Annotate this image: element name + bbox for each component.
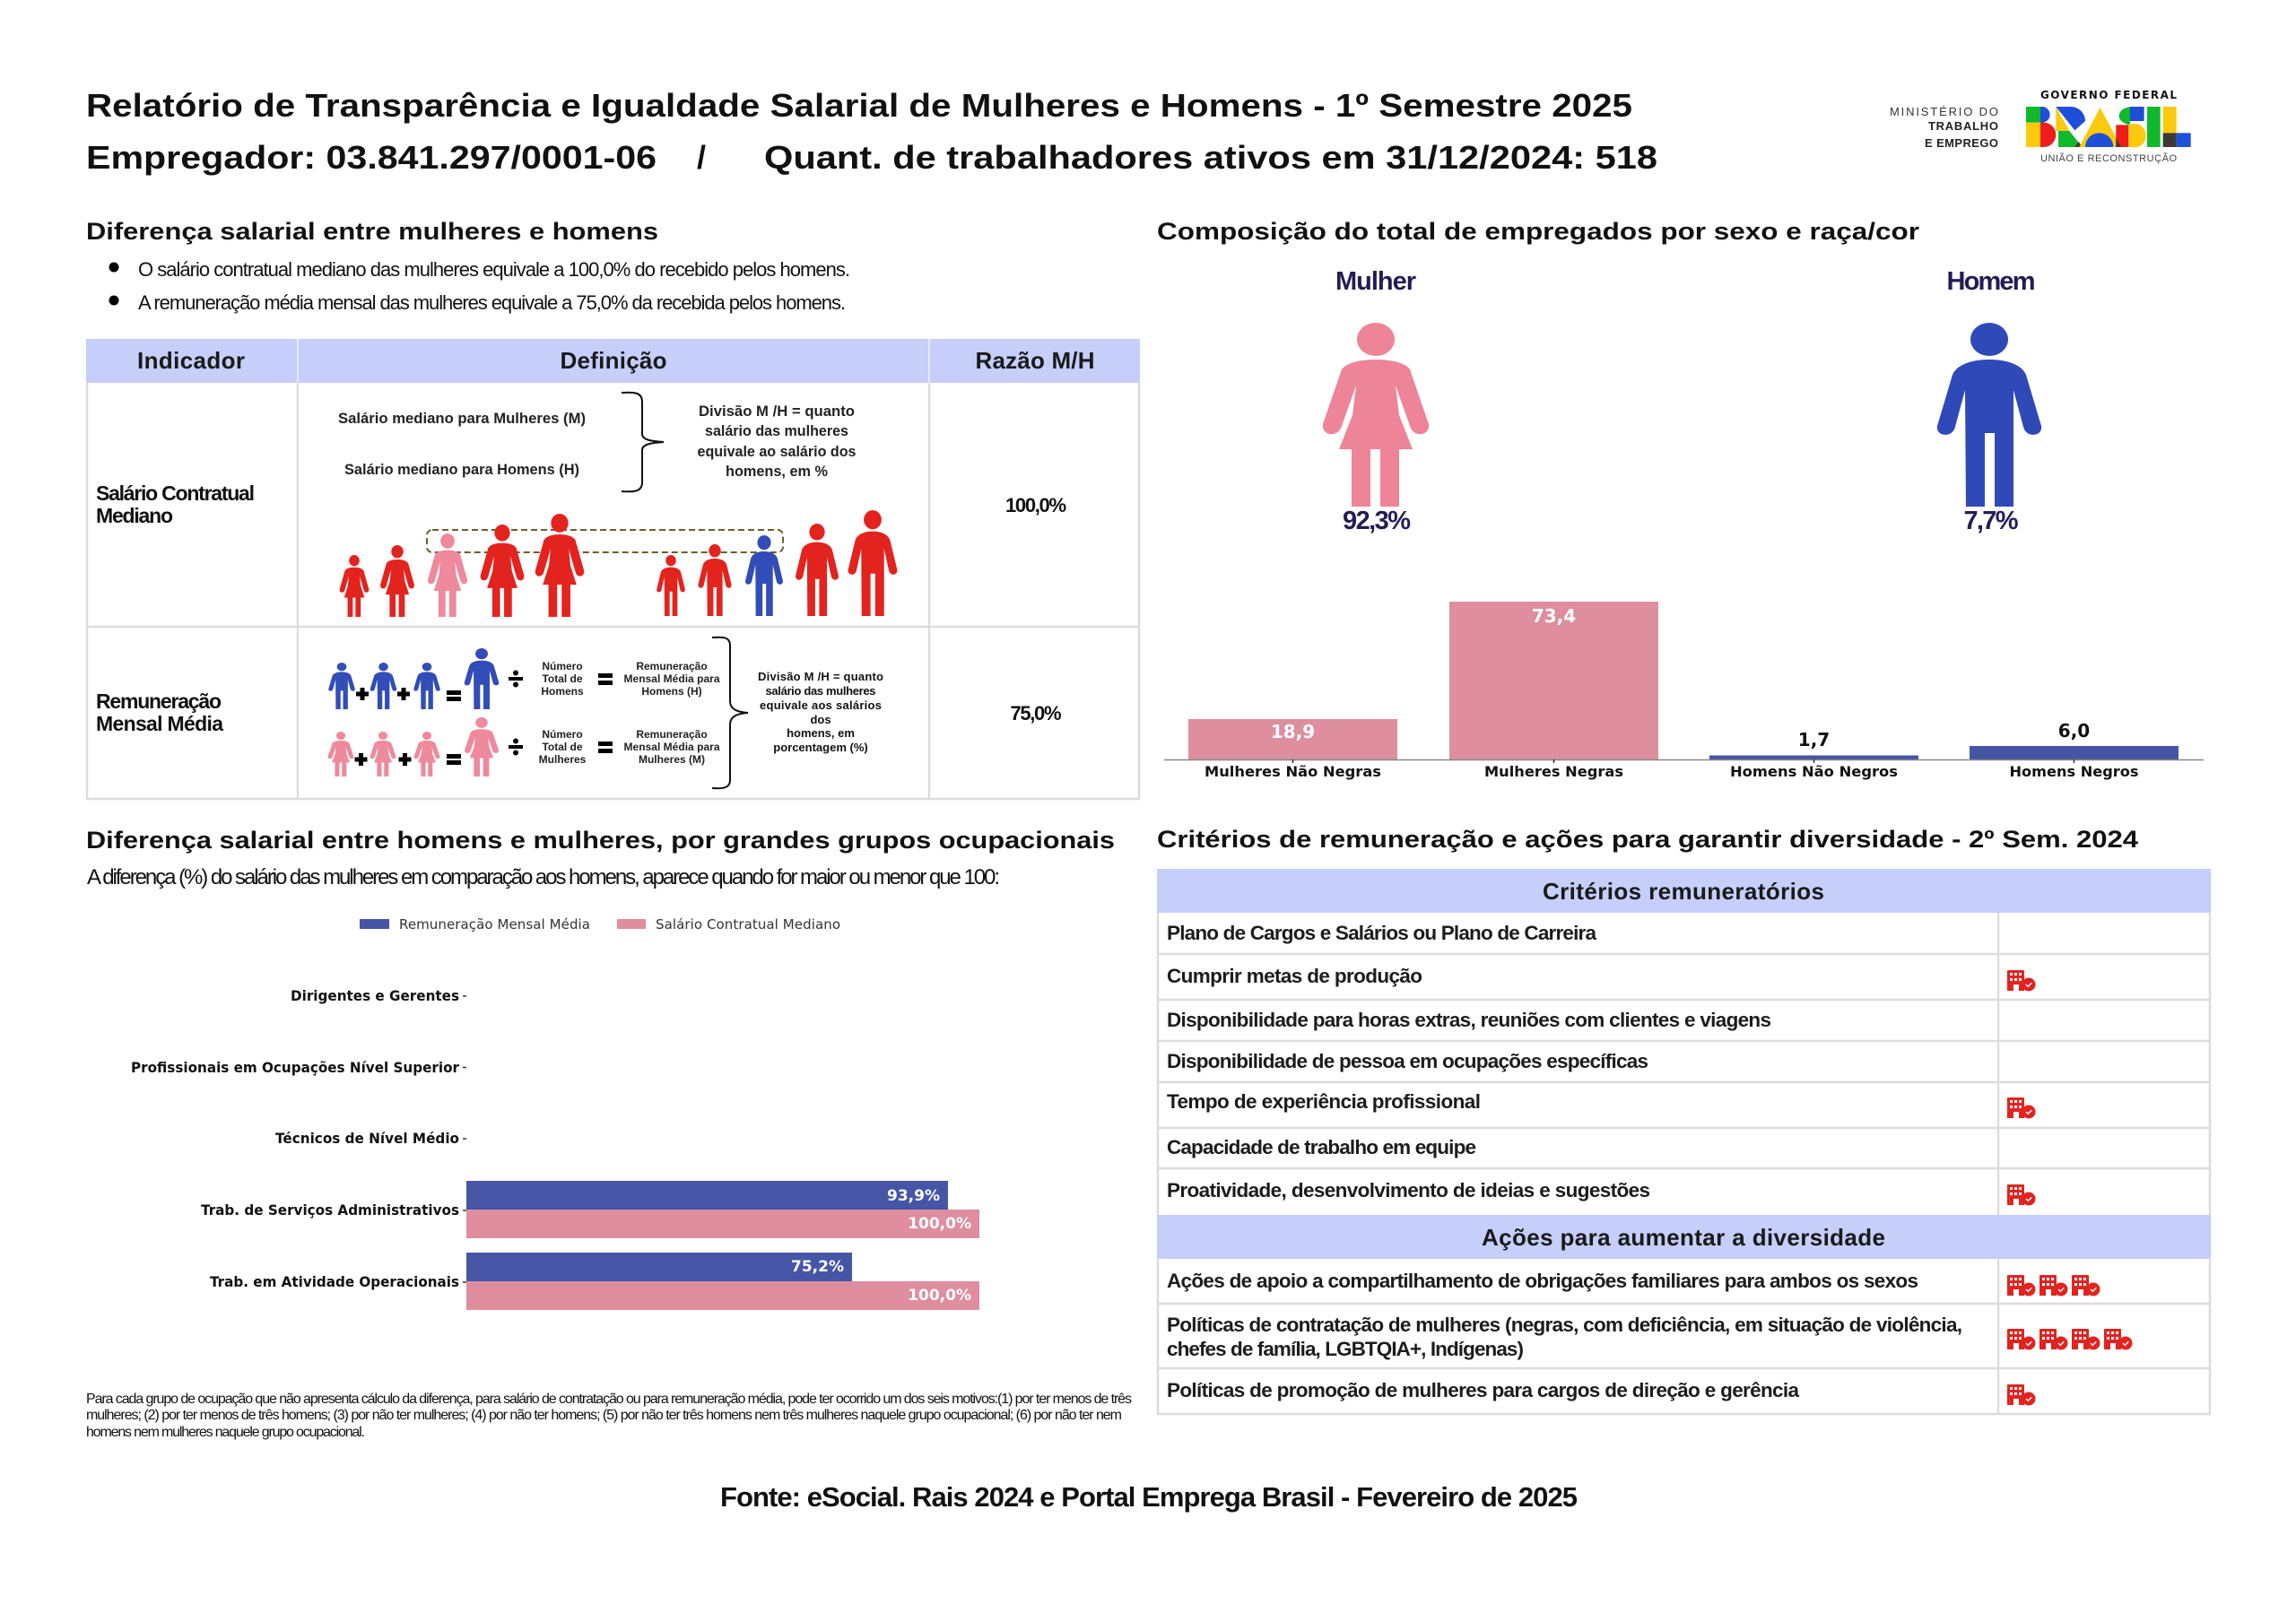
median division explanation: Divisão M /H = quanto	[699, 403, 855, 420]
diversity action rows: chefes de família, LGBTQIA+, Indígenas)	[1167, 1338, 1524, 1360]
bar chart: occupational groups: Dirigentes e Gerentes	[291, 987, 459, 1004]
logo: Ministério do Trabalho e Emprego: TRABALHO	[1928, 119, 1998, 133]
median definition text	[338, 410, 586, 478]
source line: Fonte: eSocial. Rais 2024 e Portal Emprega Brasil - Fevereiro de 2025	[720, 1481, 1578, 1513]
title line 1: Relatório de Transparência e Igualdade Salarial de Mulheres e Homens - 1º Semestre 2025	[86, 87, 1632, 124]
bar chart: composition	[1164, 602, 2204, 780]
median division explanation: homens, em %	[726, 463, 828, 480]
diversity action rows: Ações de apoio a compartilhamento de obrigações familiares para ambos os sexos	[1167, 1270, 1918, 1292]
bar chart: composition: 18,9	[1271, 721, 1315, 742]
brace: average	[712, 638, 748, 788]
title line 2: active workers: Quant. de trabalhadores ativos em 31/12/2024: 518	[764, 139, 1657, 176]
average division explanation: equivale aos salários	[760, 698, 882, 712]
men figures ordered by salary	[657, 510, 897, 616]
title separator: /	[697, 139, 706, 176]
criteria rows: Proatividade, desenvolvimento de ideias e sugestões	[1167, 1179, 1650, 1201]
header: Ações para aumentar a diversidade	[1157, 1215, 2211, 1259]
row label: Remuneração Mensal Média: Remuneração	[96, 690, 222, 713]
men average equation: Mensal Média para	[624, 672, 720, 685]
legend	[360, 916, 840, 932]
criteria rows: Plano de Cargos e Salários ou Plano de Carreira	[1167, 922, 1596, 944]
diversity action rows: Políticas de promoção de mulheres para cargos de direção e gerência	[1167, 1379, 1799, 1401]
legend: Salário Contratual Mediano	[656, 916, 840, 932]
average division explanation: porcentagem (%)	[773, 741, 868, 754]
bar chart: occupational groups: 75,2%	[791, 1258, 844, 1276]
median division explanation	[698, 403, 856, 480]
bar chart: composition: Mulheres Negras	[1484, 763, 1623, 780]
value: 75,0%: 75,0%	[1010, 702, 1062, 724]
row label: Salário Contratual Mediano	[96, 481, 255, 527]
footnote: homens nem mulheres naquele grupo ocupacional.	[86, 1425, 365, 1440]
bullet list	[109, 258, 850, 314]
panel: man share: Homem	[1946, 267, 2036, 296]
logo: Governo Federal Brasil	[2026, 89, 2191, 164]
panel: man share: 7,7%	[1964, 507, 2019, 535]
logo: Ministério do Trabalho e Emprego	[1890, 105, 1998, 150]
women average equation: Total de	[542, 741, 583, 753]
men average equation: Remuneração	[636, 660, 708, 672]
average division explanation: dos	[810, 713, 831, 726]
icons: companies count	[2007, 970, 2133, 1406]
panel: indicators table	[86, 339, 1140, 799]
bar chart: occupational groups: 93,9%	[887, 1187, 940, 1205]
men average equation: Total de	[542, 672, 583, 685]
women average equation	[328, 717, 720, 776]
men average equation: Número	[542, 660, 583, 672]
bar chart: occupational groups: Trab. de Serviços Administrativos	[201, 1201, 459, 1219]
logo: Ministério do Trabalho e Emprego: E EMPREGO	[1925, 136, 1998, 150]
women average equation: Mulheres (M)	[639, 753, 705, 766]
panel: woman share: 92,3%	[1343, 507, 1411, 535]
bar chart: occupational groups: Técnicos de Nível Médio	[275, 1130, 459, 1147]
logo: Ministério do Trabalho e Emprego: MINISTÉRIO DO	[1890, 105, 1998, 118]
women average equation: Remuneração	[636, 728, 708, 741]
bar chart: occupational groups: 100,0%	[908, 1287, 971, 1305]
row label: Salário Contratual Mediano: Mediano	[96, 504, 173, 527]
women average equation: Mulheres	[539, 753, 587, 766]
footnote	[86, 1392, 1132, 1440]
footnote: Para cada grupo de ocupação que não apresenta cálculo da diferença, para salário de contratação ou para remuneração média, pode ter ocorrido um dos seis motivos:(1) por ter menos de três	[86, 1392, 1132, 1407]
header: Ações para aumentar a diversidade: Ações para aumentar a diversidade	[1482, 1224, 1885, 1251]
bar chart: composition: 73,4	[1532, 605, 1576, 627]
panel: woman share	[1323, 267, 1429, 535]
title	[86, 87, 1657, 176]
heading: wage gap: Diferença salarial entre mulheres e homens	[86, 218, 658, 245]
panel: woman share: Mulher	[1335, 267, 1416, 296]
median division explanation: equivale ao salário dos	[698, 443, 856, 460]
median definition text: Salário mediano para Mulheres (M)	[338, 410, 586, 427]
logo: Governo Federal Brasil: UNIÃO E RECONSTRUÇÃO	[2040, 152, 2177, 164]
bar chart: occupational groups: 100,0%	[908, 1215, 971, 1233]
men average equation: Homens (H)	[641, 685, 702, 698]
women figures ordered by salary	[340, 514, 584, 617]
bar chart: composition: Homens Não Negros	[1730, 763, 1898, 780]
legend: Remuneração Mensal Média	[399, 916, 590, 932]
panel: criteria table	[1157, 869, 2211, 1414]
table header: Definição	[560, 347, 667, 374]
diversity action rows	[1167, 1270, 1962, 1401]
table header: Indicador	[137, 347, 245, 374]
bar chart: composition: Homens Negros	[2009, 763, 2138, 780]
criteria rows	[1167, 922, 1771, 1201]
average division explanation: homens, em	[787, 726, 855, 740]
criteria rows: Disponibilidade para horas extras, reuniões com clientes e viagens	[1167, 1009, 1771, 1031]
bar chart: composition: 6,0	[2058, 720, 2090, 742]
criteria rows: Capacidade de trabalho em equipe	[1167, 1136, 1476, 1158]
median dashed box	[427, 530, 783, 552]
median division explanation: salário das mulheres	[705, 422, 848, 439]
average division explanation: salário das mulheres	[766, 684, 875, 698]
heading: occupational groups: Diferença salarial entre homens e mulheres, por grandes grupos ocupacionais	[86, 827, 1115, 854]
footnote: mulheres; (2) por ter menos de três homens; (3) por não ter mulheres; (4) por não ter homens; (5) por não ter três homens nem três mulheres naquele grupo ocupacional; (6) por não ter nem	[86, 1408, 1122, 1423]
bar chart: composition: 1,7	[1798, 729, 1830, 750]
logo: Governo Federal Brasil: GOVERNO FEDERAL	[2040, 89, 2177, 101]
bullet list: O salário contratual mediano das mulheres equivale a 100,0% do recebido pelos homens.	[138, 258, 850, 281]
brace: median	[622, 393, 664, 491]
bar chart: occupational groups	[131, 987, 979, 1310]
table header: Razão M/H	[976, 347, 1094, 374]
header: Critérios remuneratórios: Critérios remuneratórios	[1543, 878, 1824, 905]
average division explanation	[758, 670, 883, 754]
men average equation: Homens	[541, 685, 584, 698]
row label: Remuneração Mensal Média	[96, 690, 223, 735]
title line 2: employer: Empregador: 03.841.297/0001-06	[86, 139, 657, 176]
diversity action rows: Políticas de contratação de mulheres (negras, com deficiência, em situação de violência,	[1167, 1314, 1962, 1336]
women average equation: Número	[542, 728, 583, 741]
women average equation: Mensal Média para	[624, 741, 720, 753]
heading: criteria: Critérios de remuneração e ações para garantir diversidade - 2º Sem. 2024	[1157, 826, 2138, 853]
value: 100,0%: 100,0%	[1005, 494, 1066, 516]
bullet list: A remuneração média mensal das mulheres equivale a 75,0% da recebida pelos homens.	[138, 291, 846, 314]
average division explanation: Divisão M /H = quanto	[758, 670, 883, 683]
median definition text: Salário mediano para Homens (H)	[344, 461, 579, 478]
row label: Remuneração Mensal Média: Mensal Média	[96, 712, 223, 735]
bar chart: occupational groups: Profissionais em Ocupações Nível Superior	[131, 1059, 459, 1076]
criteria rows: Disponibilidade de pessoa em ocupações específicas	[1167, 1050, 1648, 1072]
header: Critérios remuneratórios	[1157, 869, 2211, 913]
panel: man share	[1937, 267, 2041, 535]
heading: composition: Composição do total de empregados por sexo e raça/cor	[1157, 218, 1920, 245]
criteria rows: Cumprir metas de produção	[1167, 965, 1422, 987]
bar chart: occupational groups: Trab. em Atividade Operacionais	[210, 1273, 459, 1290]
bar chart: composition: Mulheres Não Negras	[1205, 763, 1381, 780]
men average equation	[328, 648, 720, 709]
row label: Salário Contratual Mediano: Salário Contratual	[96, 481, 255, 505]
chart subtitle: A diferença (%) do salário das mulheres em comparação aos homens, aparece quando for maior ou menor que 100:	[87, 865, 1000, 889]
criteria rows: Tempo de experiência profissional	[1167, 1090, 1481, 1113]
table header	[86, 339, 1140, 383]
